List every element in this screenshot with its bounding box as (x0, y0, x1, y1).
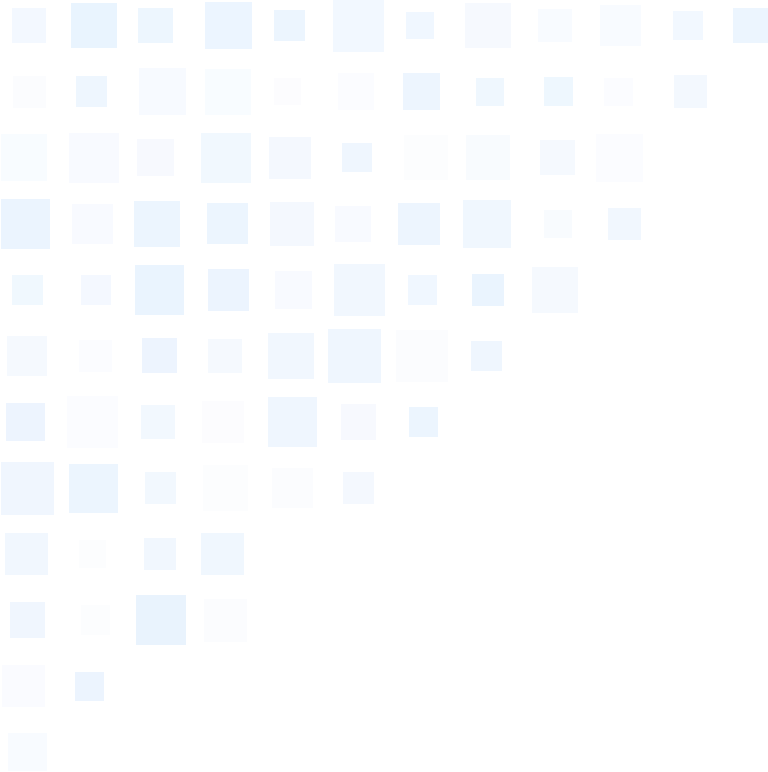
row 11 of squares (2, 665, 104, 707)
row 3 of squares (1, 133, 643, 183)
row 12 of squares (8, 733, 47, 771)
row 10 of squares (10, 595, 247, 645)
row 2 of squares (13, 68, 707, 115)
row 6 of squares (7, 329, 502, 383)
row 1 of squares (12, 0, 768, 52)
row 5 of squares (12, 264, 578, 316)
row 7 of squares (6, 396, 438, 448)
row 9 of squares (5, 533, 244, 575)
row 8 of squares (1, 462, 374, 515)
row 4 of squares (1, 199, 641, 249)
